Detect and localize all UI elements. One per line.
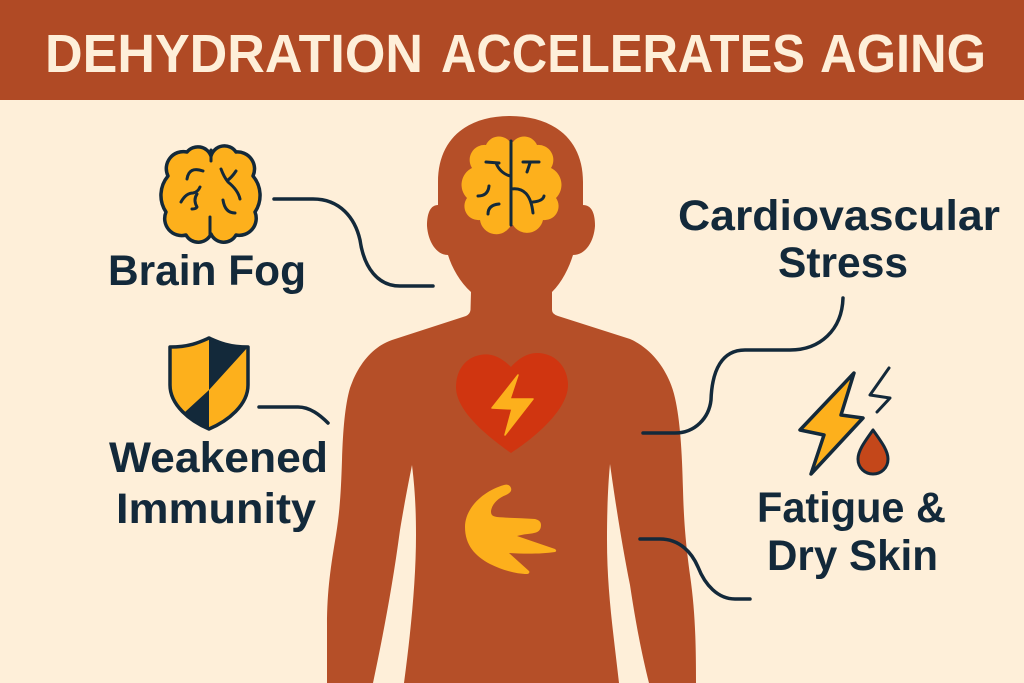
label: cardiovascular stress: Stress <box>778 239 908 287</box>
title: AGING <box>820 25 986 84</box>
body silhouette <box>327 116 696 683</box>
title: ACCELERATES <box>441 25 805 84</box>
label: cardiovascular stress: Cardiovascular <box>678 192 1000 240</box>
label: weakened immunity: Weakened <box>109 434 328 482</box>
icon: fatigue bolt and drop <box>800 368 890 474</box>
icon: shield <box>170 338 248 429</box>
icon: brain in head <box>462 136 561 234</box>
title <box>45 25 986 84</box>
icon: heart with bolt <box>456 353 568 453</box>
icon: stomach organ <box>465 485 556 574</box>
title: DEHYDRATION <box>45 25 423 84</box>
connector: cardiovascular <box>643 298 843 433</box>
label: cardiovascular stress <box>678 192 1000 287</box>
label: brain fog: Brain Fog <box>108 247 306 295</box>
title banner <box>0 0 1024 100</box>
label: fatigue and dry skin: Fatigue & <box>757 484 946 532</box>
connector: brain fog <box>274 199 433 286</box>
label: weakened immunity <box>109 434 328 533</box>
label: fatigue and dry skin: Dry Skin <box>767 532 938 580</box>
label: fatigue and dry skin <box>757 484 946 580</box>
label: weakened immunity: Immunity <box>116 485 316 533</box>
connector: fatigue <box>640 539 750 599</box>
icon: brain fog brain <box>161 146 260 242</box>
connector: immunity <box>259 407 328 423</box>
